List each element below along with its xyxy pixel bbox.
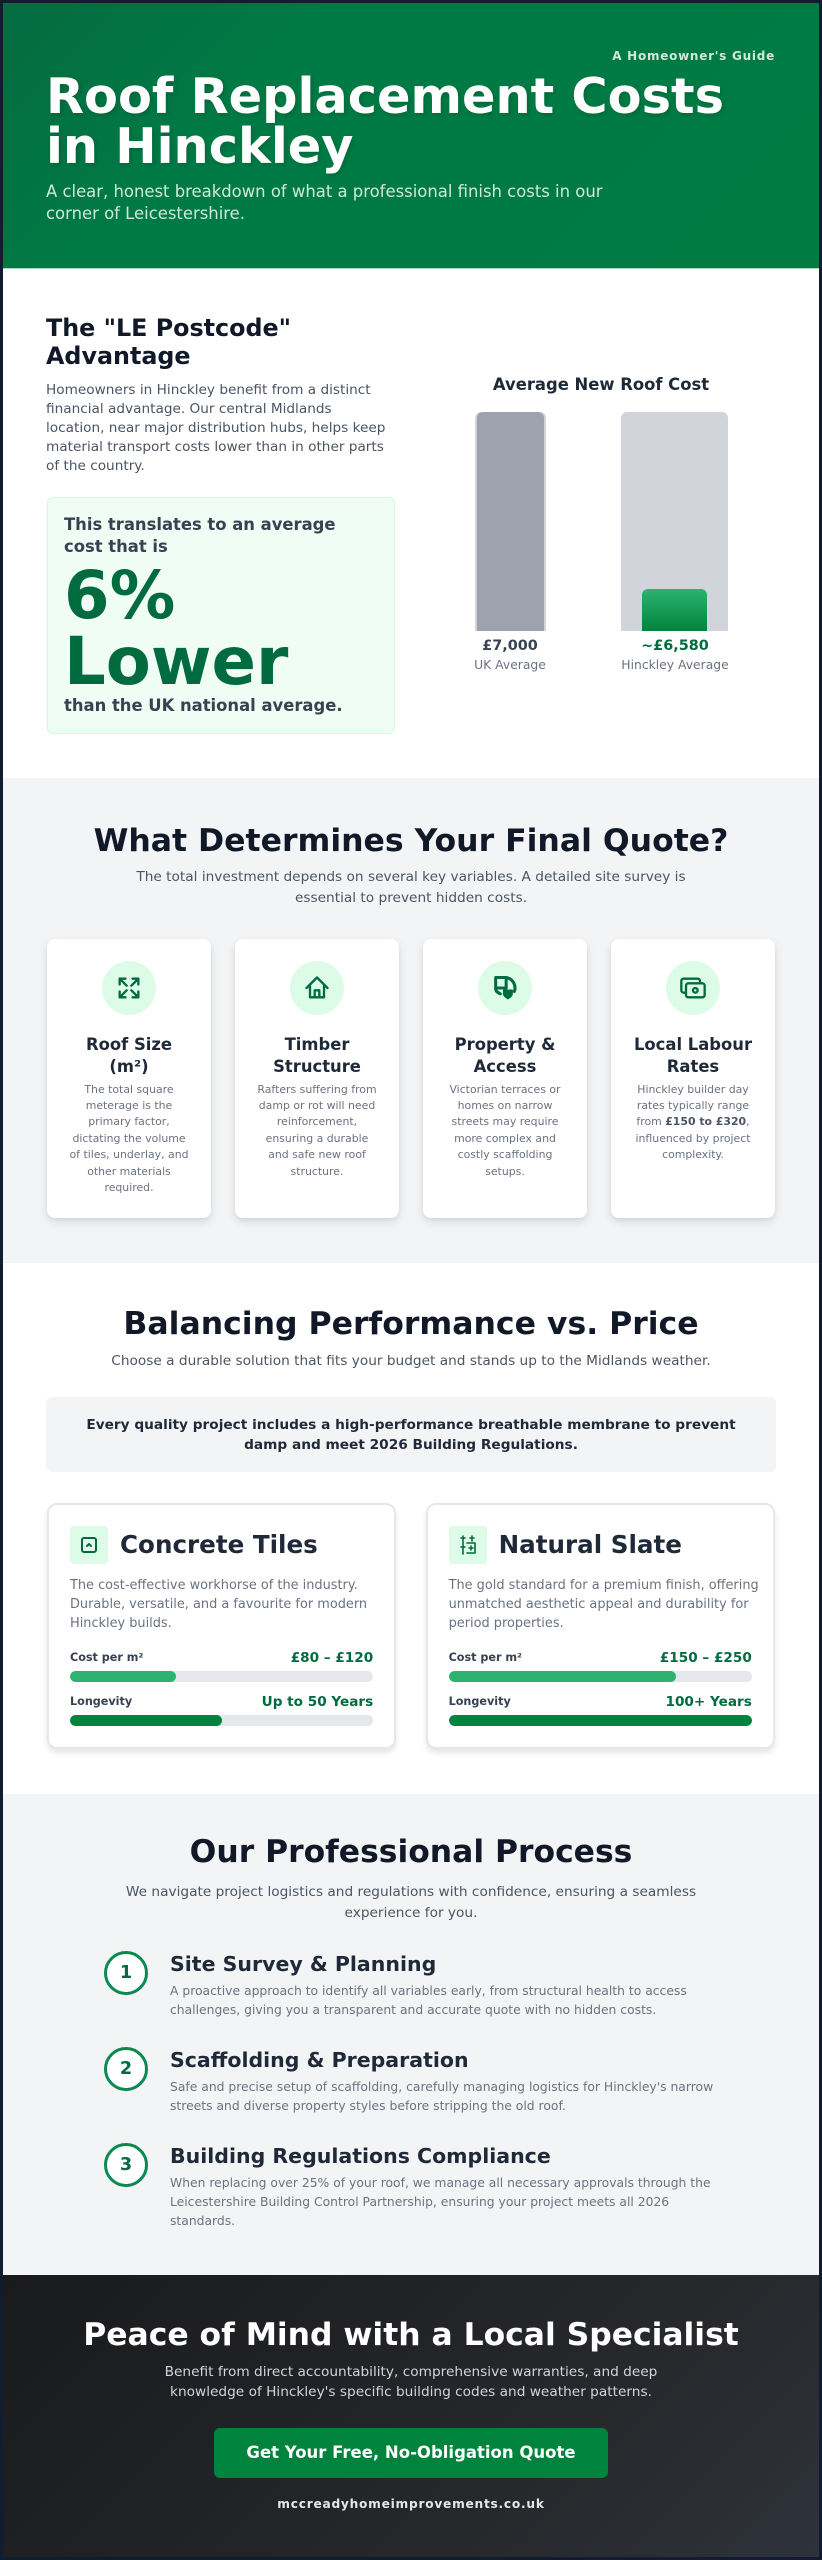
step 3 number: 3: [120, 2155, 132, 2175]
header banner: [3, 3, 819, 268]
card text: more complex and: [454, 1132, 556, 1145]
material description: Hinckley builds.: [70, 1616, 172, 1631]
card text: ensuring a durable: [266, 1132, 368, 1145]
callout: 6% lower: [47, 497, 395, 734]
card text: homes on narrow: [458, 1099, 552, 1112]
advantage paragraph: material transport costs lower than in other parts: [46, 439, 384, 455]
step 1 number: 1: [120, 1963, 132, 1983]
CTA text: knowledge of Hinckley's specific building codes and weather patterns.: [170, 2384, 652, 2400]
panel: LE postcode advantage: [3, 268, 819, 778]
website: mccreadyhomeimprovements.co.uk: [277, 2497, 545, 2511]
icon: slate: [449, 1526, 487, 1564]
bar chart: Hinckley average: [621, 412, 728, 631]
step 3 text: [170, 2176, 711, 2228]
card title: Structure: [273, 1057, 361, 1076]
card text: [69, 1083, 189, 1194]
card text: Hinckley builder day: [637, 1083, 749, 1096]
material description: [448, 1578, 759, 1631]
process intro: experience for you.: [345, 1905, 477, 1921]
quote section intro: essential to prevent hidden costs.: [295, 890, 527, 906]
longevity bar: [449, 1715, 752, 1726]
card text: The total square: [84, 1083, 174, 1096]
cost value: £80 – £120: [291, 1650, 373, 1666]
step 1 text: [170, 1984, 687, 2017]
cost label: Cost per m²: [70, 1651, 143, 1664]
card text: [257, 1083, 377, 1178]
step 1 text: challenges, giving you a transparent and accurate quote with no hidden costs.: [170, 2003, 656, 2017]
card text: Victorian terraces or: [449, 1083, 561, 1096]
label: UK Average: UK Average: [474, 658, 546, 672]
card: local labour rates: [611, 939, 775, 1218]
icon: banknotes: [666, 961, 720, 1015]
step 3 number: [104, 2143, 148, 2187]
card title: [273, 1035, 361, 1076]
material title: Natural Slate: [499, 1530, 682, 1559]
card text: reinforcement,: [277, 1115, 357, 1128]
card text: setups.: [485, 1165, 525, 1178]
material description: The cost-effective workhorse of the industry.: [70, 1578, 358, 1592]
step 2 title: Scaffolding & Preparation: [170, 2048, 469, 2072]
material description: unmatched aesthetic appeal and durability for: [449, 1597, 749, 1612]
card title: [455, 1035, 555, 1076]
longevity label: Longevity: [70, 1695, 132, 1708]
advantage paragraph: financial advantage. Our central Midlands: [46, 401, 332, 417]
material description: period properties.: [449, 1616, 564, 1631]
material description: Durable, versatile, and a favourite for modern: [70, 1597, 367, 1612]
subtitle: corner of Leicestershire.: [46, 204, 245, 223]
quote section intro: [136, 869, 686, 906]
step 2 number: 2: [120, 2059, 132, 2079]
callout lead-in text: [64, 515, 336, 556]
value: ~£6,580: ~£6,580: [641, 638, 709, 654]
card text: dictating the volume: [72, 1132, 186, 1145]
process intro: [126, 1884, 696, 1921]
card text: of tiles, underlay, and: [69, 1148, 189, 1161]
big stat: 6% Lower: 6%: [64, 558, 175, 634]
cost bar: [70, 1671, 373, 1682]
process intro: We navigate project logistics and regulations with confidence, ensuring a seamless: [126, 1884, 696, 1900]
card text: and safe new roof: [268, 1148, 366, 1161]
step 1 title: Site Survey & Planning: [170, 1952, 436, 1976]
step 3 text: standards.: [170, 2214, 235, 2228]
cost bar: [449, 1671, 752, 1682]
step 2 number: [104, 2047, 148, 2091]
step 2 text: streets and diverse property styles before stripping the old roof.: [170, 2099, 566, 2113]
big stat: 6% Lower: [64, 558, 288, 700]
callout lead-in text: cost that is: [64, 537, 168, 556]
title: [46, 67, 724, 176]
advantage paragraph: [46, 382, 385, 474]
card text: meterage is the: [86, 1099, 172, 1112]
card text: primary factor,: [88, 1115, 170, 1128]
label: Hinckley Average: Hinckley Average: [621, 658, 729, 672]
card title: Local Labour: [634, 1035, 752, 1054]
heading: LE Postcode Advantage: Advantage: [46, 342, 191, 370]
card: natural slate: [426, 1503, 775, 1749]
card text: streets may require: [452, 1115, 558, 1128]
panel: professional process: [3, 1794, 819, 2275]
longevity label: Longevity: [449, 1695, 511, 1708]
advantage paragraph: location, near major distribution hubs, helps keep: [46, 420, 385, 436]
card text: structure.: [291, 1165, 343, 1178]
material description: The gold standard for a premium finish, offering: [449, 1578, 759, 1592]
card title: [86, 1035, 172, 1076]
card text: influenced by project: [636, 1132, 750, 1145]
card: roof size: [47, 939, 211, 1218]
note: breathable membrane: [46, 1397, 776, 1472]
card title: Timber: [285, 1035, 349, 1054]
icon: expand arrows: [102, 961, 156, 1015]
CTA text: Benefit from direct accountability, comprehensive warranties, and deep: [165, 2364, 657, 2380]
card text: required.: [104, 1181, 154, 1194]
eyebrow: A Homeowner's Guide: A Homeowner's Guide: [612, 49, 775, 63]
heading: LE Postcode Advantage: The "LE Postcode": [46, 314, 291, 342]
card title: Property &: [455, 1035, 555, 1054]
card text: complexity.: [662, 1148, 724, 1161]
card text: from £150 to £320,: [636, 1115, 750, 1128]
title: in Hinckley: [46, 117, 353, 175]
callout closing text: than the UK national average.: [64, 696, 343, 715]
card: concrete tiles: [47, 1503, 396, 1749]
cost label: Cost per m²: [449, 1651, 522, 1664]
title: Roof Replacement Costs: [46, 67, 724, 125]
step 3 text: When replacing over 25% of your roof, we manage all necessary approvals through the: [170, 2176, 711, 2190]
advantage paragraph: Homeowners in Hinckley benefit from a distinct: [46, 382, 371, 398]
advantage paragraph: of the country.: [46, 458, 145, 474]
card: property and access: [423, 939, 587, 1218]
heading: LE Postcode Advantage: [46, 314, 291, 370]
panel: call to action: [3, 2275, 819, 2557]
card text: other materials: [87, 1165, 171, 1178]
cost value: £150 – £250: [660, 1650, 752, 1666]
material description: [70, 1578, 367, 1631]
step 3 text: Leicestershire Building Control Partnership, ensuring your project meets all 2026: [170, 2195, 669, 2209]
card text: rates typically range: [637, 1099, 749, 1112]
card title: [634, 1035, 752, 1076]
subtitle: [46, 182, 602, 223]
note: breathable membrane: damp and meet 2026 Building Regulations.: [244, 1436, 578, 1452]
CTA text: [165, 2364, 657, 2400]
longevity bar: [70, 1715, 373, 1726]
step 2 text: [170, 2080, 713, 2113]
bar chart: UK average: [475, 412, 546, 631]
card text: costly scaffolding: [458, 1148, 552, 1161]
card text: [636, 1083, 750, 1161]
icon: property shield: [478, 961, 532, 1015]
material title: Concrete Tiles: [120, 1530, 318, 1559]
icon: tile: [70, 1526, 108, 1564]
CTA button: [214, 2428, 608, 2478]
value: £7,000: £7,000: [482, 638, 538, 654]
callout lead-in text: This translates to an average: [64, 515, 336, 534]
card text: damp or rot will need: [259, 1099, 375, 1112]
step 3 title: Building Regulations Compliance: [170, 2144, 551, 2168]
step 2 text: Safe and precise setup of scaffolding, carefully managing logistics for Hinckley's narrow: [170, 2080, 713, 2094]
note: breathable membrane: Every quality project includes a high-performance breathable membrane to prevent: [86, 1416, 736, 1432]
CTA heading: Peace of Mind with a Local Specialist: [83, 2317, 739, 2353]
subtitle: A clear, honest breakdown of what a professional finish costs in our: [46, 182, 602, 201]
panel: performance vs price: [3, 1263, 819, 1794]
chart title: Average New Roof Cost: [493, 375, 709, 394]
step 1 number: [104, 1951, 148, 1995]
longevity value: 100+ Years: [666, 1694, 752, 1710]
CTA button: Get Your Free, No-Obligation Quote: [246, 2443, 576, 2462]
card title: Rates: [667, 1057, 719, 1076]
card title: (m²): [109, 1057, 149, 1076]
card text: [449, 1083, 561, 1178]
card title: Roof Size: [86, 1035, 172, 1054]
panel: what determines your quote: [3, 778, 819, 1263]
materials intro: Choose a durable solution that fits your budget and stands up to the Midlands weather.: [111, 1353, 711, 1369]
card: timber structure: [235, 939, 399, 1218]
longevity value: Up to 50 Years: [262, 1694, 373, 1710]
quote section intro: The total investment depends on several key variables. A detailed site survey is: [136, 869, 686, 885]
heading: Our Professional Process: Our Professional Process: [190, 1834, 632, 1870]
heading: What Determines Your Final Quote: What Determines Your Final Quote?: [94, 823, 728, 859]
icon: house: [290, 961, 344, 1015]
card text: Rafters suffering from: [257, 1083, 377, 1096]
card title: Access: [474, 1057, 536, 1076]
big stat: 6% Lower: Lower: [64, 624, 288, 700]
step 1 text: A proactive approach to identify all variables early, from structural health to access: [170, 1984, 687, 1998]
heading: Balancing Performance vs. Price: Balancing Performance vs. Price: [123, 1306, 699, 1342]
